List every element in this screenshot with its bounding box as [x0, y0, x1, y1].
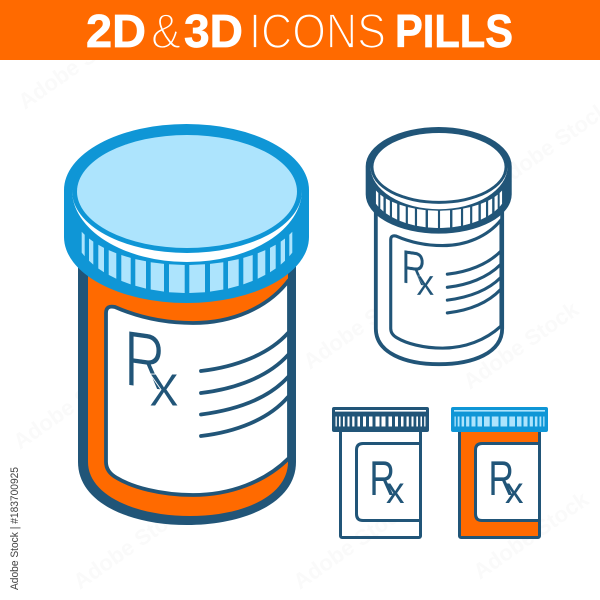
- cap top surface: [373, 133, 505, 201]
- cap top ring: [72, 129, 302, 253]
- orange body fill: [460, 425, 540, 538]
- cap ribs: [454, 416, 544, 426]
- bottle cap: [64, 124, 309, 303]
- title: &: [151, 5, 181, 59]
- label text lines: [447, 252, 500, 313]
- label: [356, 444, 420, 520]
- watermark: Adobe Stock: [459, 296, 584, 394]
- watermark: Adobe Stock: [299, 276, 424, 374]
- Rx symbol: x: [505, 470, 524, 511]
- Rx symbol: x: [416, 263, 434, 303]
- Rx symbol: R: [401, 239, 426, 296]
- cap rim highlight: [370, 166, 508, 209]
- Rx symbol: R: [488, 451, 514, 506]
- title: ICONS: [249, 5, 386, 59]
- icon: large colored 3D pill bottle: [64, 124, 309, 525]
- Rx symbol: x: [386, 470, 405, 511]
- white label: [106, 280, 289, 495]
- bottle body outline: [376, 202, 502, 364]
- cap ribs: [376, 191, 502, 228]
- Rx symbol: [124, 313, 179, 419]
- icon: outline 2D pill bottle: [332, 407, 429, 538]
- title: PILLS: [395, 5, 513, 57]
- cap: [332, 407, 429, 432]
- stock credit: Adobe Stock | #183700925: [9, 467, 21, 590]
- cap top surface: [77, 135, 297, 248]
- title: 2D: [86, 5, 146, 57]
- label text lines: [201, 333, 288, 436]
- orange bottle fill: [88, 250, 288, 516]
- cap ribs: [82, 232, 292, 293]
- watermark: Adobe Stock: [9, 356, 134, 454]
- watermark: Adobe Stock: [69, 496, 194, 594]
- cap: [366, 127, 512, 234]
- bottle body: [340, 425, 420, 538]
- cap line: [454, 410, 545, 412]
- cap top ring: [370, 130, 508, 204]
- cap ribs: [336, 416, 426, 426]
- watermark: Adobe Stock: [14, 16, 139, 114]
- cap: [451, 407, 548, 432]
- icon: colored 2D pill bottle: [451, 407, 548, 538]
- watermark: Adobe Stock: [289, 496, 414, 594]
- header banner: [0, 0, 600, 60]
- label outline: [391, 220, 501, 348]
- icon: outline 3D pill bottle: [366, 127, 512, 364]
- Rx symbol: [370, 451, 405, 511]
- cap white rim highlight: [72, 190, 302, 262]
- bottle body: [78, 250, 296, 525]
- bottle outline: [460, 425, 540, 538]
- Rx symbol: [401, 239, 434, 303]
- Rx symbol: R: [124, 313, 166, 408]
- Rx symbol: R: [370, 451, 395, 506]
- watermark: Adobe Stock: [469, 486, 594, 584]
- Rx symbol: x: [149, 352, 179, 419]
- title: [86, 5, 513, 59]
- cap line: [335, 410, 426, 412]
- Rx symbol: [488, 451, 524, 511]
- title: 3D: [184, 5, 243, 57]
- label: [476, 444, 539, 520]
